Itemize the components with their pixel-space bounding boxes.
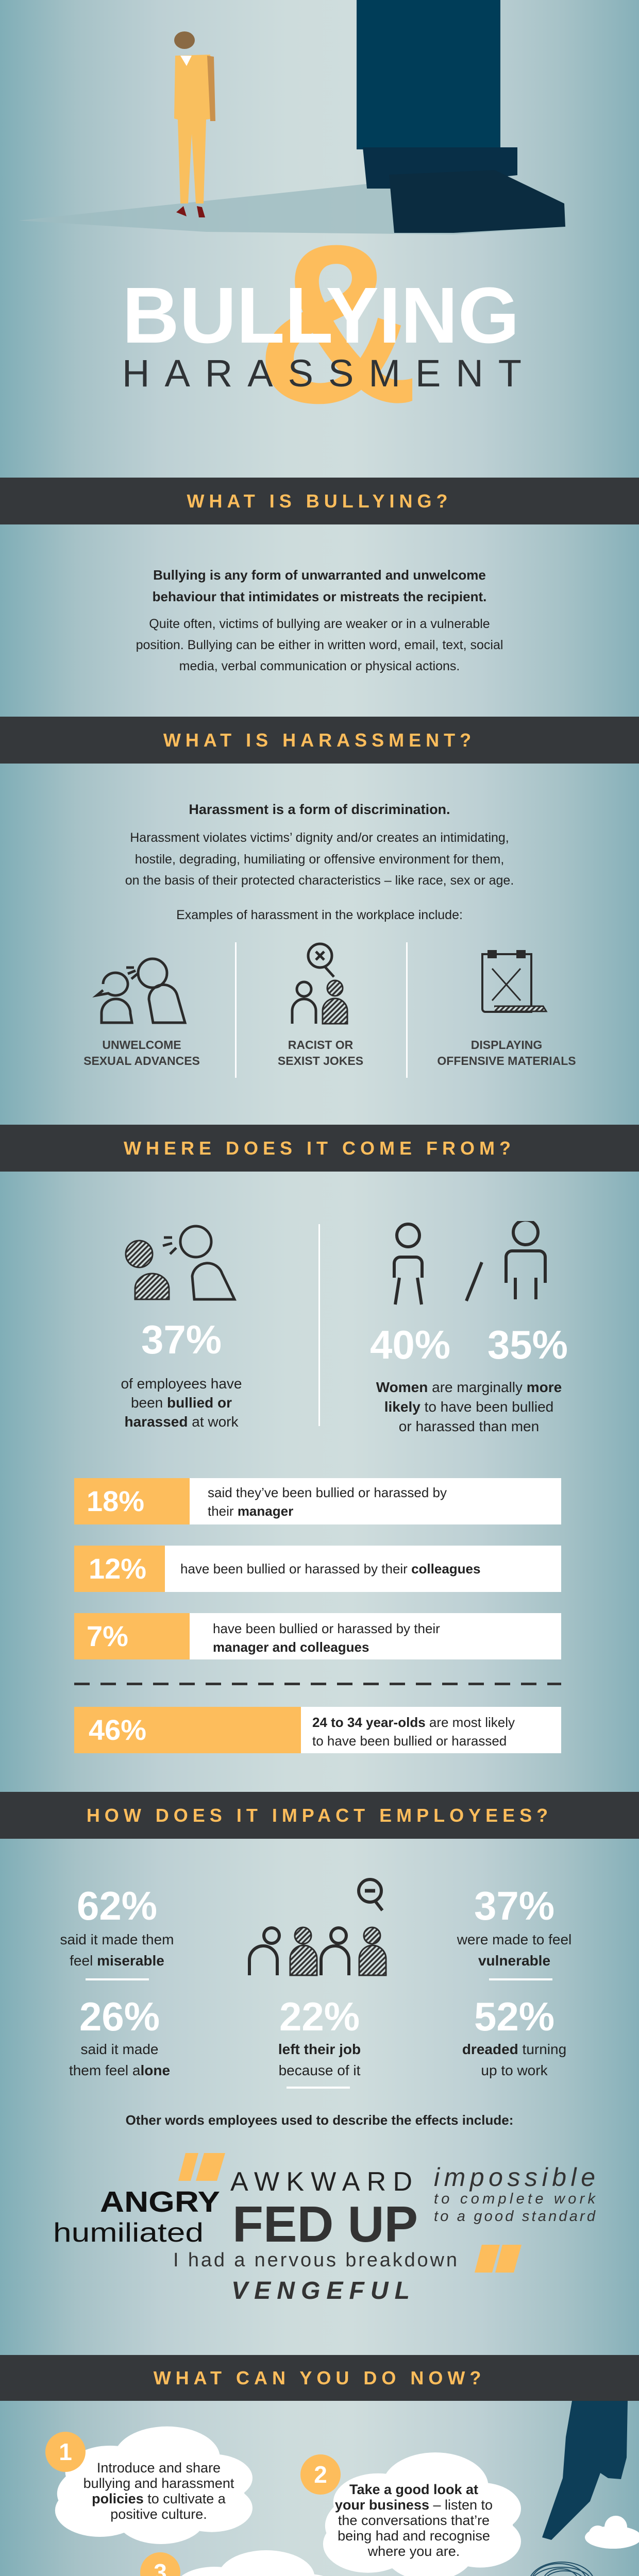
- word cloud: [53, 2153, 596, 2304]
- bar: 12%: [74, 1546, 561, 1592]
- illustrations and clouds: [55, 2401, 639, 2576]
- shadow: [19, 181, 567, 234]
- text: your business – listen to: [335, 2497, 493, 2513]
- stat: 37%: of employees have: [121, 1376, 242, 1392]
- bar: 46%: [74, 1707, 561, 1753]
- word cloud: humiliated: [53, 2218, 204, 2248]
- bar: 7%: [74, 1613, 561, 1659]
- heading: other words: Other words employees used to describe the effects include:: [126, 2112, 513, 2128]
- clouds: [50, 2427, 587, 2576]
- text: bullying definition: media, verbal communication or physical actions.: [179, 659, 460, 673]
- icon: group of people: [248, 1878, 386, 1976]
- stat: 26%: them feel alone: [69, 2062, 170, 2078]
- labels: UNWELCOME: [102, 1038, 181, 1052]
- stat: 62%: 62%: [77, 1883, 157, 1928]
- stat: 37%: [121, 1317, 242, 1430]
- labels: [83, 1038, 576, 1067]
- header: where does it come from: WHERE DOES IT COME FROM?: [124, 1138, 515, 1159]
- bar: 18%: their manager: [208, 1503, 293, 1519]
- word cloud: VENGEFUL: [231, 2277, 410, 2304]
- labels: DISPLAYING: [471, 1038, 542, 1052]
- stat: 22%: 22%: [279, 1994, 360, 2039]
- stat: 26%: said it made: [81, 2041, 158, 2057]
- ampersand: &: [256, 197, 419, 450]
- bar: 7%: manager and colleagues: [213, 1639, 369, 1655]
- stat: 52%: [462, 1994, 566, 2078]
- bar: 46%: 46%: [89, 1714, 146, 1746]
- header: what is harassment: WHAT IS HARASSMENT?: [163, 730, 476, 751]
- dashed divider: [74, 1683, 561, 1685]
- stat: 37% vulnerable: were made to feel: [457, 1931, 571, 1947]
- step 3: [140, 2552, 180, 2576]
- text: harassment definition: [125, 802, 514, 922]
- stat: 62%: said it made them: [60, 1931, 174, 1947]
- word cloud: to a good standard: [434, 2208, 596, 2225]
- icon: bullied person: [126, 1226, 234, 1299]
- text: harassment definition: Examples of harassment in the workplace include:: [176, 908, 463, 922]
- icon: unwelcome sexual advances: [97, 959, 185, 1023]
- stat: 52%: 52%: [474, 1994, 554, 2039]
- small cloud right: [585, 2516, 639, 2549]
- text: bullying definition: [136, 567, 503, 673]
- stat: 37%: 37%: [141, 1317, 222, 1362]
- bar: 18%: [74, 1478, 561, 1524]
- word cloud: I had a nervous breakdown: [173, 2249, 457, 2271]
- header: what can you do now: WHAT CAN YOU DO NOW?: [154, 2367, 485, 2388]
- text: bullying definition: position. Bullying can be either in written word, email, text, social: [136, 638, 503, 652]
- stat: 40% 35%: Women are marginally more: [376, 1379, 562, 1395]
- word cloud: AWKWARD: [230, 2167, 412, 2197]
- bar: 18%: said they’ve been bullied or harassed by: [208, 1485, 447, 1500]
- step 2: 2: [314, 2461, 327, 2488]
- text: where you are.: [368, 2544, 460, 2559]
- divider: [406, 942, 408, 1078]
- header: what can you do now: [0, 2355, 639, 2401]
- header: where does it come from: [0, 1125, 639, 1172]
- stat: 22%: [278, 1994, 361, 2078]
- header: what is harassment: [0, 717, 639, 764]
- divider: [235, 942, 237, 1078]
- title: harassment: HARASSMENT: [122, 352, 522, 395]
- bar: 12%: 12%: [89, 1552, 146, 1585]
- text: bullying definition: Bullying is any form of unwarranted and unwelcome: [153, 567, 486, 583]
- labels: SEXIST JOKES: [278, 1054, 363, 1067]
- bar: 7%: have been bullied or harassed by their: [213, 1621, 440, 1636]
- stat: 26%: [69, 1994, 170, 2078]
- stat: 22%: because of it: [279, 2062, 360, 2078]
- labels: RACIST OR: [288, 1038, 354, 1052]
- stat: 22%: left their job: [278, 2041, 361, 2057]
- divider: [318, 1224, 320, 1307]
- stat: 52%: dreaded turning: [462, 2041, 566, 2057]
- stat: 37%: harassed at work: [125, 1414, 238, 1430]
- word cloud: ANGRY: [100, 2185, 220, 2218]
- text: the conversations that’re: [338, 2513, 490, 2528]
- where icons: [125, 1221, 547, 1307]
- bar: 46%: to have been bullied or harassed: [312, 1733, 507, 1749]
- woman figure: [174, 31, 215, 217]
- stat: 37% vulnerable: 37%: [474, 1883, 554, 1928]
- text: harassment definition: hostile, degrading, humiliating or offensive environment for them,: [135, 852, 504, 867]
- text: Take a good look at: [349, 2482, 478, 2497]
- stat: 40% 35%: or harassed than men: [399, 1418, 539, 1434]
- text: bullying and harassment: [83, 2476, 234, 2491]
- stat: 40% 35%: 40% 35%: [370, 1322, 568, 1367]
- text: being had and recognise: [338, 2528, 490, 2544]
- word cloud: FED UP: [232, 2196, 418, 2252]
- stat: 37%: been bullied or: [131, 1395, 232, 1411]
- title: bullying: BULLYING: [122, 271, 519, 360]
- text: harassment definition: on the basis of their protected characteristics – like race, sex or age.: [125, 873, 514, 888]
- hero illustration and title: [20, 0, 565, 450]
- text: bullying definition: Quite often, victims of bullying are weaker or in a vulnerable: [149, 617, 490, 631]
- text: policies to cultivate a: [92, 2491, 226, 2506]
- giant legs: [357, 0, 565, 233]
- header: how does it impact employees: [0, 1792, 639, 1839]
- stat: 40% 35%: [370, 1322, 568, 1434]
- word cloud: to complete work: [434, 2191, 596, 2207]
- icon: racist or sexist jokes: [292, 944, 347, 1024]
- stat: 62%: feel miserable: [70, 1953, 164, 1969]
- icon: woman and man: [394, 1220, 545, 1304]
- text: Introduce and share: [97, 2460, 221, 2476]
- labels: SEXUAL ADVANCES: [83, 1054, 200, 1067]
- labels: OFFENSIVE MATERIALS: [437, 1054, 576, 1067]
- stat: 26%: 26%: [79, 1994, 160, 2039]
- text: bullying definition: behaviour that intimidates or mistreats the recipient.: [153, 589, 486, 604]
- bar: 7%: 7%: [87, 1620, 128, 1652]
- stat: 62%: [60, 1883, 174, 1969]
- bar: 46%: 24 to 34 year-olds are most likely: [312, 1715, 515, 1730]
- step 2: [300, 2454, 341, 2495]
- stat: 37% vulnerable: vulnerable: [478, 1953, 550, 1969]
- bar: 12%: have been bullied or harassed by their colleagues: [180, 1561, 480, 1577]
- stat: 52%: up to work: [481, 2062, 548, 2078]
- stat: 37% vulnerable: [457, 1883, 571, 1969]
- step 1: 1: [59, 2438, 72, 2465]
- text: harassment definition: Harassment is a form of discrimination.: [189, 802, 450, 817]
- icon: displaying offensive materials: [482, 951, 546, 1012]
- header: how does it impact employees: HOW DOES IT IMPACT EMPLOYEES?: [87, 1805, 552, 1826]
- step 1: [45, 2432, 86, 2472]
- bar: 18%: 18%: [87, 1485, 144, 1517]
- text: harassment definition: Harassment violates victims’ dignity and/or creates an intimidating,: [130, 831, 509, 845]
- icon: pointing hand: [542, 2401, 628, 2540]
- header: what is bullying: [0, 478, 639, 524]
- harassment icons: [83, 942, 576, 1078]
- text: positive culture.: [110, 2506, 207, 2522]
- word cloud: impossible: [434, 2163, 595, 2192]
- header: what is bullying: WHAT IS BULLYING?: [187, 490, 452, 512]
- stat: 40% 35%: likely to have been bullied: [384, 1399, 553, 1415]
- icon: scribble thought: [529, 2562, 595, 2576]
